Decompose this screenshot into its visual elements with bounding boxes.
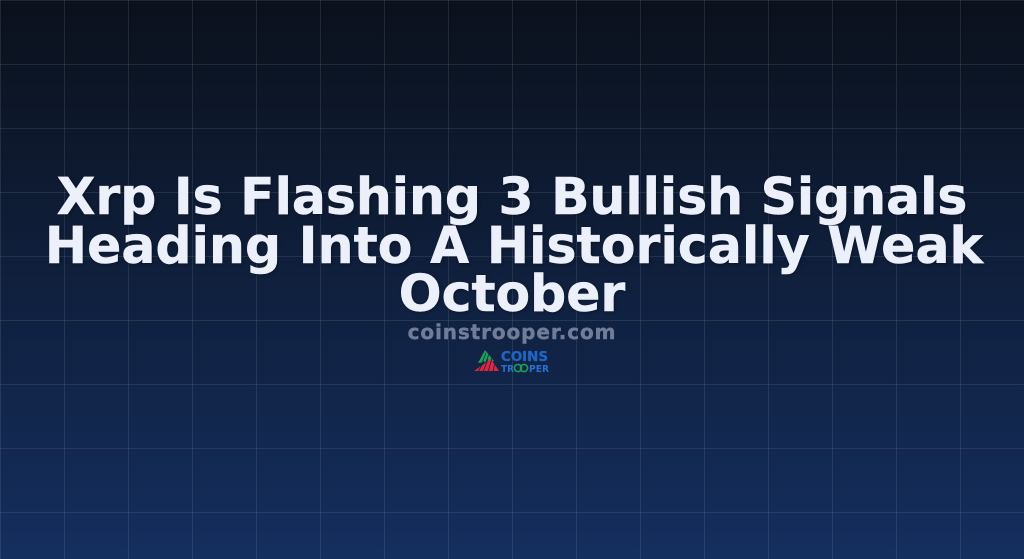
website label: coinstrooper.com <box>408 320 616 344</box>
title: October <box>399 264 625 323</box>
title: Heading Into A Historically Weak <box>45 216 983 274</box>
logo: Coins Trooper <box>474 349 550 375</box>
letters: TR: TR <box>501 364 515 375</box>
title: Xrp Is Flashing 3 Bullish Signals <box>57 167 967 226</box>
icon: green striped peak <box>478 350 494 363</box>
icon: double O <box>514 364 528 372</box>
letters: PER: PER <box>529 364 550 375</box>
icon: red striped peak <box>474 358 499 372</box>
title <box>45 167 984 323</box>
logo word: COINS: COINS <box>501 349 548 365</box>
logo word: TROOPER <box>501 364 550 375</box>
